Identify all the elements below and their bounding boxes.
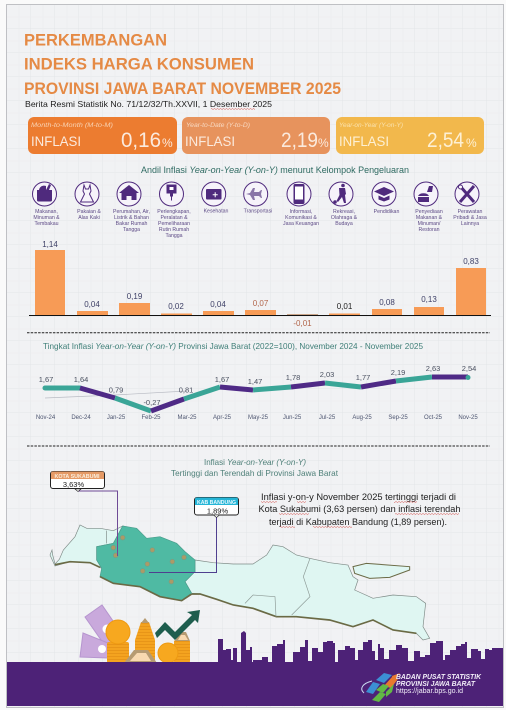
banknote, upper [85,605,122,650]
line chart: yearly inflation: 1,47 [248,377,262,386]
Banten province [50,525,123,568]
footer band with skyline [7,631,503,706]
icon row: expenditure groups [32,182,479,206]
line chart: yearly inflation: 1,77 [356,373,370,382]
footer text: agency: BADAN PUSAT STATISTIK [396,674,482,681]
callout: Kota Sukabumi: KOTA SUKABUMI [54,474,100,480]
callout: Kab Bandung: 1,89% [207,506,228,516]
small sack [175,632,190,641]
map: Java island [50,525,430,640]
category labels: Bakar Rumah [116,221,147,227]
line chart: yearly inflation: May-25 [248,415,269,421]
line chart: yearly inflation: 2,03 [320,370,334,379]
text block: map summary: Inflasi y-on-y November 2025 tertinggi terjadi di [261,492,456,503]
panel: month-to-month inflation: 0,16 [121,129,161,152]
panel: year-on-year inflation: 2,54 [427,129,464,152]
category labels: Minuman/ [418,221,441,227]
line chart: yearly inflation: Dec-24 [71,415,91,421]
panel: month-to-month inflation: % [162,136,173,150]
line chart: yearly inflation: Aug-25 [352,415,372,421]
category labels: Jasa Keuangan [283,221,319,227]
line chart: yearly inflation: 1,67 [215,375,229,384]
panel: month-to-month inflation [28,117,177,154]
bar chart: contribution by group: 1,14 [42,240,58,249]
line chart: yearly inflation: Nov-25 [458,415,478,421]
city markers [111,535,186,584]
icon: scissors and comb [455,182,479,206]
line chart: yearly inflation: 0,79 [109,386,123,394]
category labels: Perlengkapan, [157,209,191,215]
line chart: yearly inflation: Nov-24 [36,415,56,421]
bar chart: contribution by group: 0,01 [337,302,353,311]
line chart: yearly inflation: 2,19 [391,368,405,377]
line chart: yearly inflation: -0,27 [143,398,161,407]
icon: dress [75,182,99,206]
line chart: yearly inflation [36,364,478,421]
panel: year-on-year inflation: Year-on-Year (Y-on-Y) [339,122,403,129]
category labels: Alas Kaki [78,215,100,221]
panel: year-on-year inflation: % [466,136,477,150]
connector: Kota Sukabumi [78,491,118,556]
bar chart: contribution by group: 0,19 [127,292,143,301]
banknote, lower [80,633,108,658]
subtitle: release number: Berita Resmi Statistik No. 71/12/32/Th.XXVII, 1 Desember 2025 [25,99,272,109]
line chart: yearly inflation: 0,81 [179,386,193,394]
callout: Kota Sukabumi: 3,63% [63,480,84,489]
panel: year-to-date inflation: % [318,136,329,150]
category labels: Makanan & [416,215,443,221]
panel: year-to-date inflation [182,117,330,154]
category labels: Informasi, [290,209,312,215]
connector: Kab Bandung [149,517,216,572]
heading: map: Inflasi Year-on-Year (Y-on-Y) [204,457,306,467]
bar chart: contribution by group: 0,04 [210,300,226,309]
category labels: Penyediaan [415,209,443,215]
line chart: yearly inflation: Oct-25 [424,415,443,421]
footer text: agency: https://jabar.bps.go.id [396,688,463,695]
category labels: Tembakau [35,221,59,227]
category labels: Budaya [335,221,353,227]
line chart: yearly inflation: Apr-25 [213,415,232,421]
line chart: yearly inflation: 1,78 [286,373,300,382]
category labels: Rutin Rumah [159,227,189,233]
category labels: Perumahan, Air, [113,209,150,215]
icon: graduation cap [372,182,396,206]
West Java province [97,526,195,601]
Madura island [353,563,410,578]
icon: health kit [202,182,226,206]
bar chart: contribution by group [29,240,491,328]
text block: map summary [258,492,460,528]
category labels: Rekreasi, [333,209,355,215]
category labels: Pribadi & Jasa [453,215,487,221]
icon: airplane [244,182,268,206]
category labels: Restoran [418,227,440,233]
category labels: Komunikasi & [285,215,317,221]
footer text: agency: PROVINSI JAWA BARAT [396,681,476,688]
panel: year-on-year inflation: INFLASI [339,133,389,149]
bar chart: contribution by group: 0,13 [421,295,437,304]
category labels: Transportasi [244,208,272,214]
category labels: Pemeliharaan [158,221,190,227]
title: PERKEMBANGAN [24,30,167,50]
category labels: Perawatan [458,209,483,215]
bar chart: contribution by group: -0,01 [293,319,312,328]
heading: map: Tertinggi dan Terendah di Provinsi Jawa Barat [171,468,339,478]
category labels: Kesehatan [204,208,229,214]
heading: line chart: Tingkat Inflasi Year-on-Year (Y-on-Y) Provinsi Jawa Barat (2022=100), November 2024 - November 2025 [43,341,423,351]
logo: BPS [362,673,400,702]
line chart: yearly inflation: 2,63 [426,364,440,373]
rising arrow [155,610,200,640]
category labels: Olahraga & [331,215,358,221]
bar chart: contribution by group: 0,07 [253,299,269,308]
category labels: Tangga [123,227,140,233]
illustration: money and coins [80,605,200,663]
sack top [141,618,149,623]
line chart: yearly inflation: Feb-25 [141,415,161,421]
category labels: Pakaian & [77,209,101,215]
line chart: yearly inflation: 1,67 [39,375,53,384]
panel: year-to-date inflation: INFLASI [185,133,235,149]
panel: year-to-date inflation: Year-to-Date (Y-to-D) [186,122,250,129]
title: PROVINSI JAWA BARAT NOVEMBER 2025 [24,79,341,98]
line chart: yearly inflation: Mar-25 [177,415,197,421]
text block: map summary: terjadi di Kabupaten Bandung (1,89 persen). [269,517,447,528]
line chart: yearly inflation: Sep-25 [388,415,408,421]
heading: map [171,457,339,478]
panel: month-to-month inflation: Month-to-Month (M-to-M) [31,122,113,129]
category labels: Lainnya [461,221,479,227]
line chart: yearly inflation: Jul-25 [319,415,336,421]
panel: year-to-date inflation: 2,19 [281,129,318,152]
bar chart: contribution by group: 0,08 [379,298,395,307]
Central and East Java [185,545,430,640]
heading: contribution chart: Andil Inflasi Year-on-Year (Y-on-Y) menurut Kelompok Pengeluaran [141,165,409,175]
callout: Kab Bandung: KAB BANDUNG [197,500,236,506]
category labels: Makanan, [35,209,58,215]
title [24,30,341,98]
line chart: yearly inflation: 1,64 [74,375,88,384]
bar chart: contribution by group: 0,83 [463,257,479,266]
text block: map summary: Kota Sukabumi (3,63 persen) dan inflasi terendah [258,504,460,515]
bar chart: contribution by group: 0,02 [168,302,184,311]
line chart: yearly inflation: Jan-25 [107,415,126,421]
category labels: Listrik & Bahan [114,215,149,221]
icon: smartphone [287,182,311,206]
category labels: Tangga [165,233,183,239]
icon: food basket [32,182,56,206]
category labels: Pendidikan [374,209,399,215]
panel: year-on-year inflation [336,117,484,154]
category labels: Minuman & [33,215,60,221]
title: INDEKS HARGA KONSUMEN [24,54,254,74]
line chart: yearly inflation: Jun-25 [283,415,302,421]
panel: month-to-month inflation: INFLASI [31,133,81,149]
gold coins [106,620,190,663]
icon: house [117,182,141,206]
icon: football player [329,182,353,206]
callout: Kab Bandung [194,498,238,518]
line chart: yearly inflation: 2,54 [462,364,476,373]
category labels [33,208,487,239]
footer text: agency [396,674,482,695]
category labels: Peralatan & [160,215,188,221]
icon: food and drink [414,182,438,206]
money sack, centre [124,650,157,663]
icon: household appliance [160,182,184,206]
bar chart: contribution by group: 0,04 [84,300,100,309]
callout: Kota Sukabumi [50,472,104,492]
